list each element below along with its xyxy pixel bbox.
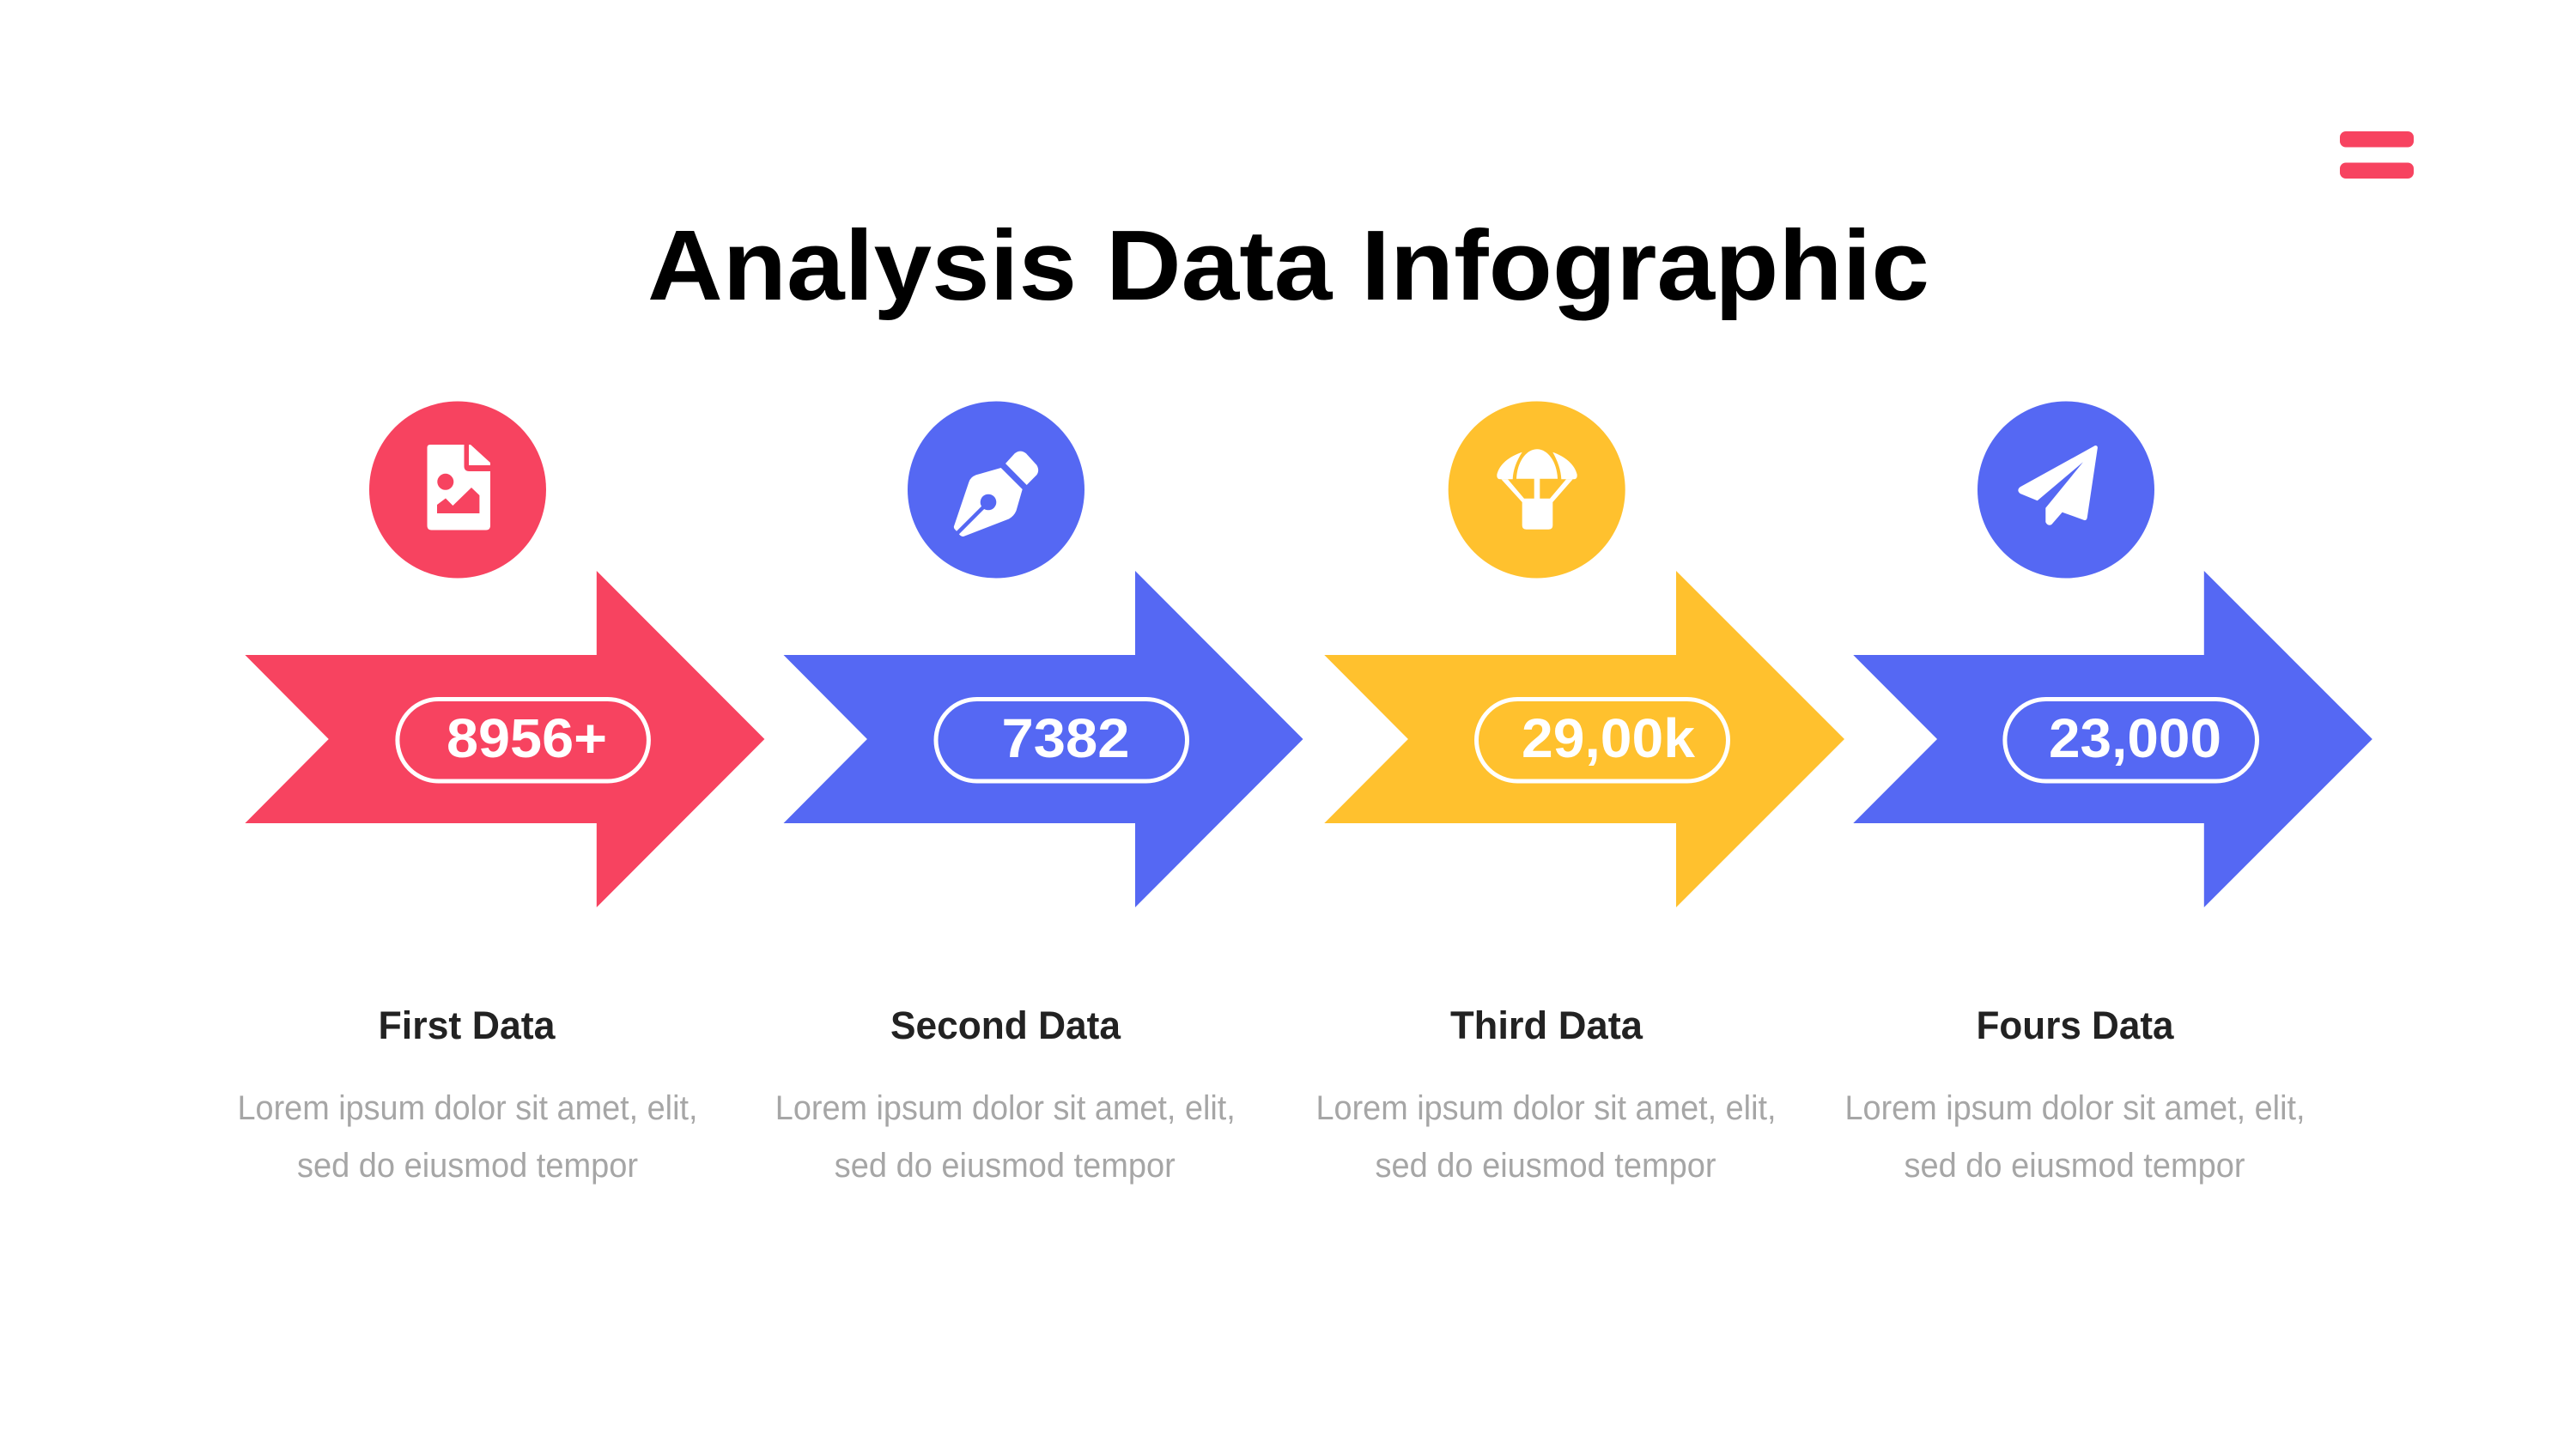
text block: First Data: Lorem ipsum dolor sit amet, elit, (237, 1089, 697, 1127)
title: Analysis Data Infographic (647, 209, 1929, 321)
value pill 3 (1477, 699, 1728, 781)
text block: Second Data: sed do eiusmod tempor (835, 1147, 1176, 1185)
text block: Third Data: Third Data (1450, 1003, 1643, 1047)
value pill 2 (936, 699, 1187, 781)
arrow 3: yellow (1324, 571, 1844, 907)
menu icon (2340, 131, 2414, 179)
value pill 4: 23,000 (2049, 707, 2221, 769)
value pill 1 (398, 699, 648, 781)
text block: First Data: First Data (378, 1003, 556, 1047)
value pill 3: 29,00k (1522, 707, 1695, 769)
arrow 1: red (245, 571, 764, 907)
text block: Fours Data: Fours Data (1977, 1003, 2174, 1047)
icon: fountain pen in blue circle (908, 402, 1084, 579)
icon: image file in red circle (369, 402, 546, 579)
text block: Fours Data (1844, 1003, 2305, 1185)
text block: Second Data: Lorem ipsum dolor sit amet, elit, (775, 1089, 1236, 1127)
value pill 2: 7382 (1001, 707, 1130, 769)
icon: paper plane in blue circle (1978, 402, 2154, 579)
text block: Third Data (1315, 1003, 1776, 1185)
text block: Fours Data: Lorem ipsum dolor sit amet, elit, (1844, 1089, 2305, 1127)
text block: Third Data: Lorem ipsum dolor sit amet, elit, (1315, 1089, 1776, 1127)
icon: parachute in yellow circle (1449, 402, 1625, 579)
value pill 4 (2005, 699, 2257, 781)
text block: First Data: sed do eiusmod tempor (297, 1147, 638, 1185)
value pill 1: 8956+ (447, 707, 607, 769)
text block: Third Data: sed do eiusmod tempor (1376, 1147, 1716, 1185)
text block: First Data (237, 1003, 697, 1185)
text block: Fours Data: sed do eiusmod tempor (1905, 1147, 2245, 1185)
arrow 4: blue (1853, 571, 2372, 907)
text block: Second Data (775, 1003, 1236, 1185)
text block: Second Data: Second Data (890, 1003, 1121, 1047)
arrow 2: blue (783, 571, 1303, 907)
